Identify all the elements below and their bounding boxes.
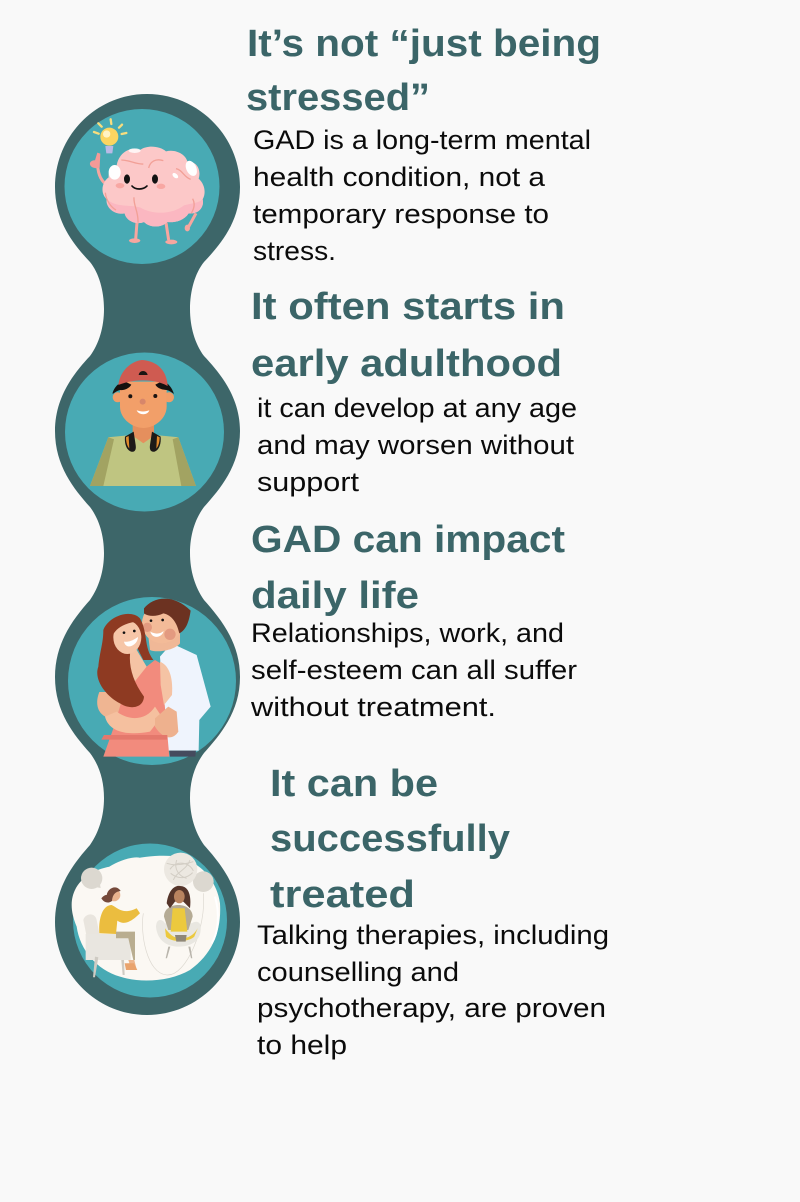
text: talking therapies: to help (257, 1030, 347, 1060)
text: talking therapies: counselling and (257, 957, 459, 987)
woman's skin (160, 662, 172, 705)
text: GAD description: health condition, not a (253, 162, 546, 192)
heading: not just being stressed (246, 23, 601, 119)
text: develop at any age: and may worsen without (257, 430, 575, 460)
speech bubbles (93, 881, 101, 888)
man's arm behind woman (97, 692, 125, 717)
section 2: early adulthood (251, 286, 577, 497)
text: relationships: self-esteem can all suffer (251, 655, 577, 685)
icon: smiling hugging couple (68, 597, 236, 765)
arms hugging (105, 707, 162, 733)
heading: starts in early adulthood: It often starts in (251, 286, 565, 328)
text: GAD description: temporary response to (253, 199, 549, 229)
heading: impact daily life: GAD can impact (251, 519, 565, 561)
text: GAD description: GAD is a long-term mental (253, 125, 591, 155)
man (160, 643, 211, 751)
heading: successfully treated: successfully (270, 818, 510, 860)
text: relationships: Relationships, work, and (251, 618, 564, 648)
headphones (125, 432, 136, 452)
text: talking therapies (257, 920, 609, 1060)
chain of connected circles (55, 94, 240, 1015)
text: relationships (250, 618, 577, 722)
heading: successfully treated (270, 763, 510, 916)
section 1: not just stress (246, 23, 601, 266)
text: develop at any age: support (257, 467, 360, 497)
woman dress (103, 660, 169, 757)
section 4: treatment (257, 763, 609, 1060)
icon: therapist and client session (72, 844, 227, 998)
section 3: daily life (250, 519, 577, 722)
icon: cute brain with light bulb (64, 109, 220, 264)
text: talking therapies: Talking therapies, including (257, 920, 609, 950)
icon: boy with red cap and headphones (65, 352, 224, 512)
heading: not just being stressed: It’s not “just being (247, 23, 601, 65)
face (113, 392, 123, 402)
hair (113, 381, 131, 394)
heading: impact daily life: daily life (251, 575, 419, 617)
therapist (83, 914, 100, 937)
icon: light bulb (94, 119, 126, 153)
client (156, 920, 201, 947)
text: relationships: without treatment. (250, 692, 496, 722)
woman's hair (97, 614, 153, 707)
heading: impact daily life (251, 519, 565, 617)
text: talking therapies: psychotherapy, are proven (257, 993, 606, 1023)
heading: successfully treated: treated (270, 874, 415, 916)
cap (118, 360, 168, 386)
text: develop at any age: it can develop at any age (257, 393, 577, 423)
heading: starts in early adulthood (251, 286, 565, 385)
brain body (102, 147, 205, 226)
text: GAD description (253, 125, 591, 266)
heading: successfully treated: It can be (270, 763, 438, 805)
text: develop at any age (257, 393, 577, 497)
shirt (90, 435, 196, 486)
heading: starts in early adulthood: early adulthood (251, 343, 562, 385)
white bubble (72, 856, 220, 981)
text: GAD description: stress. (253, 236, 336, 266)
heading: not just being stressed: stressed” (246, 77, 430, 119)
